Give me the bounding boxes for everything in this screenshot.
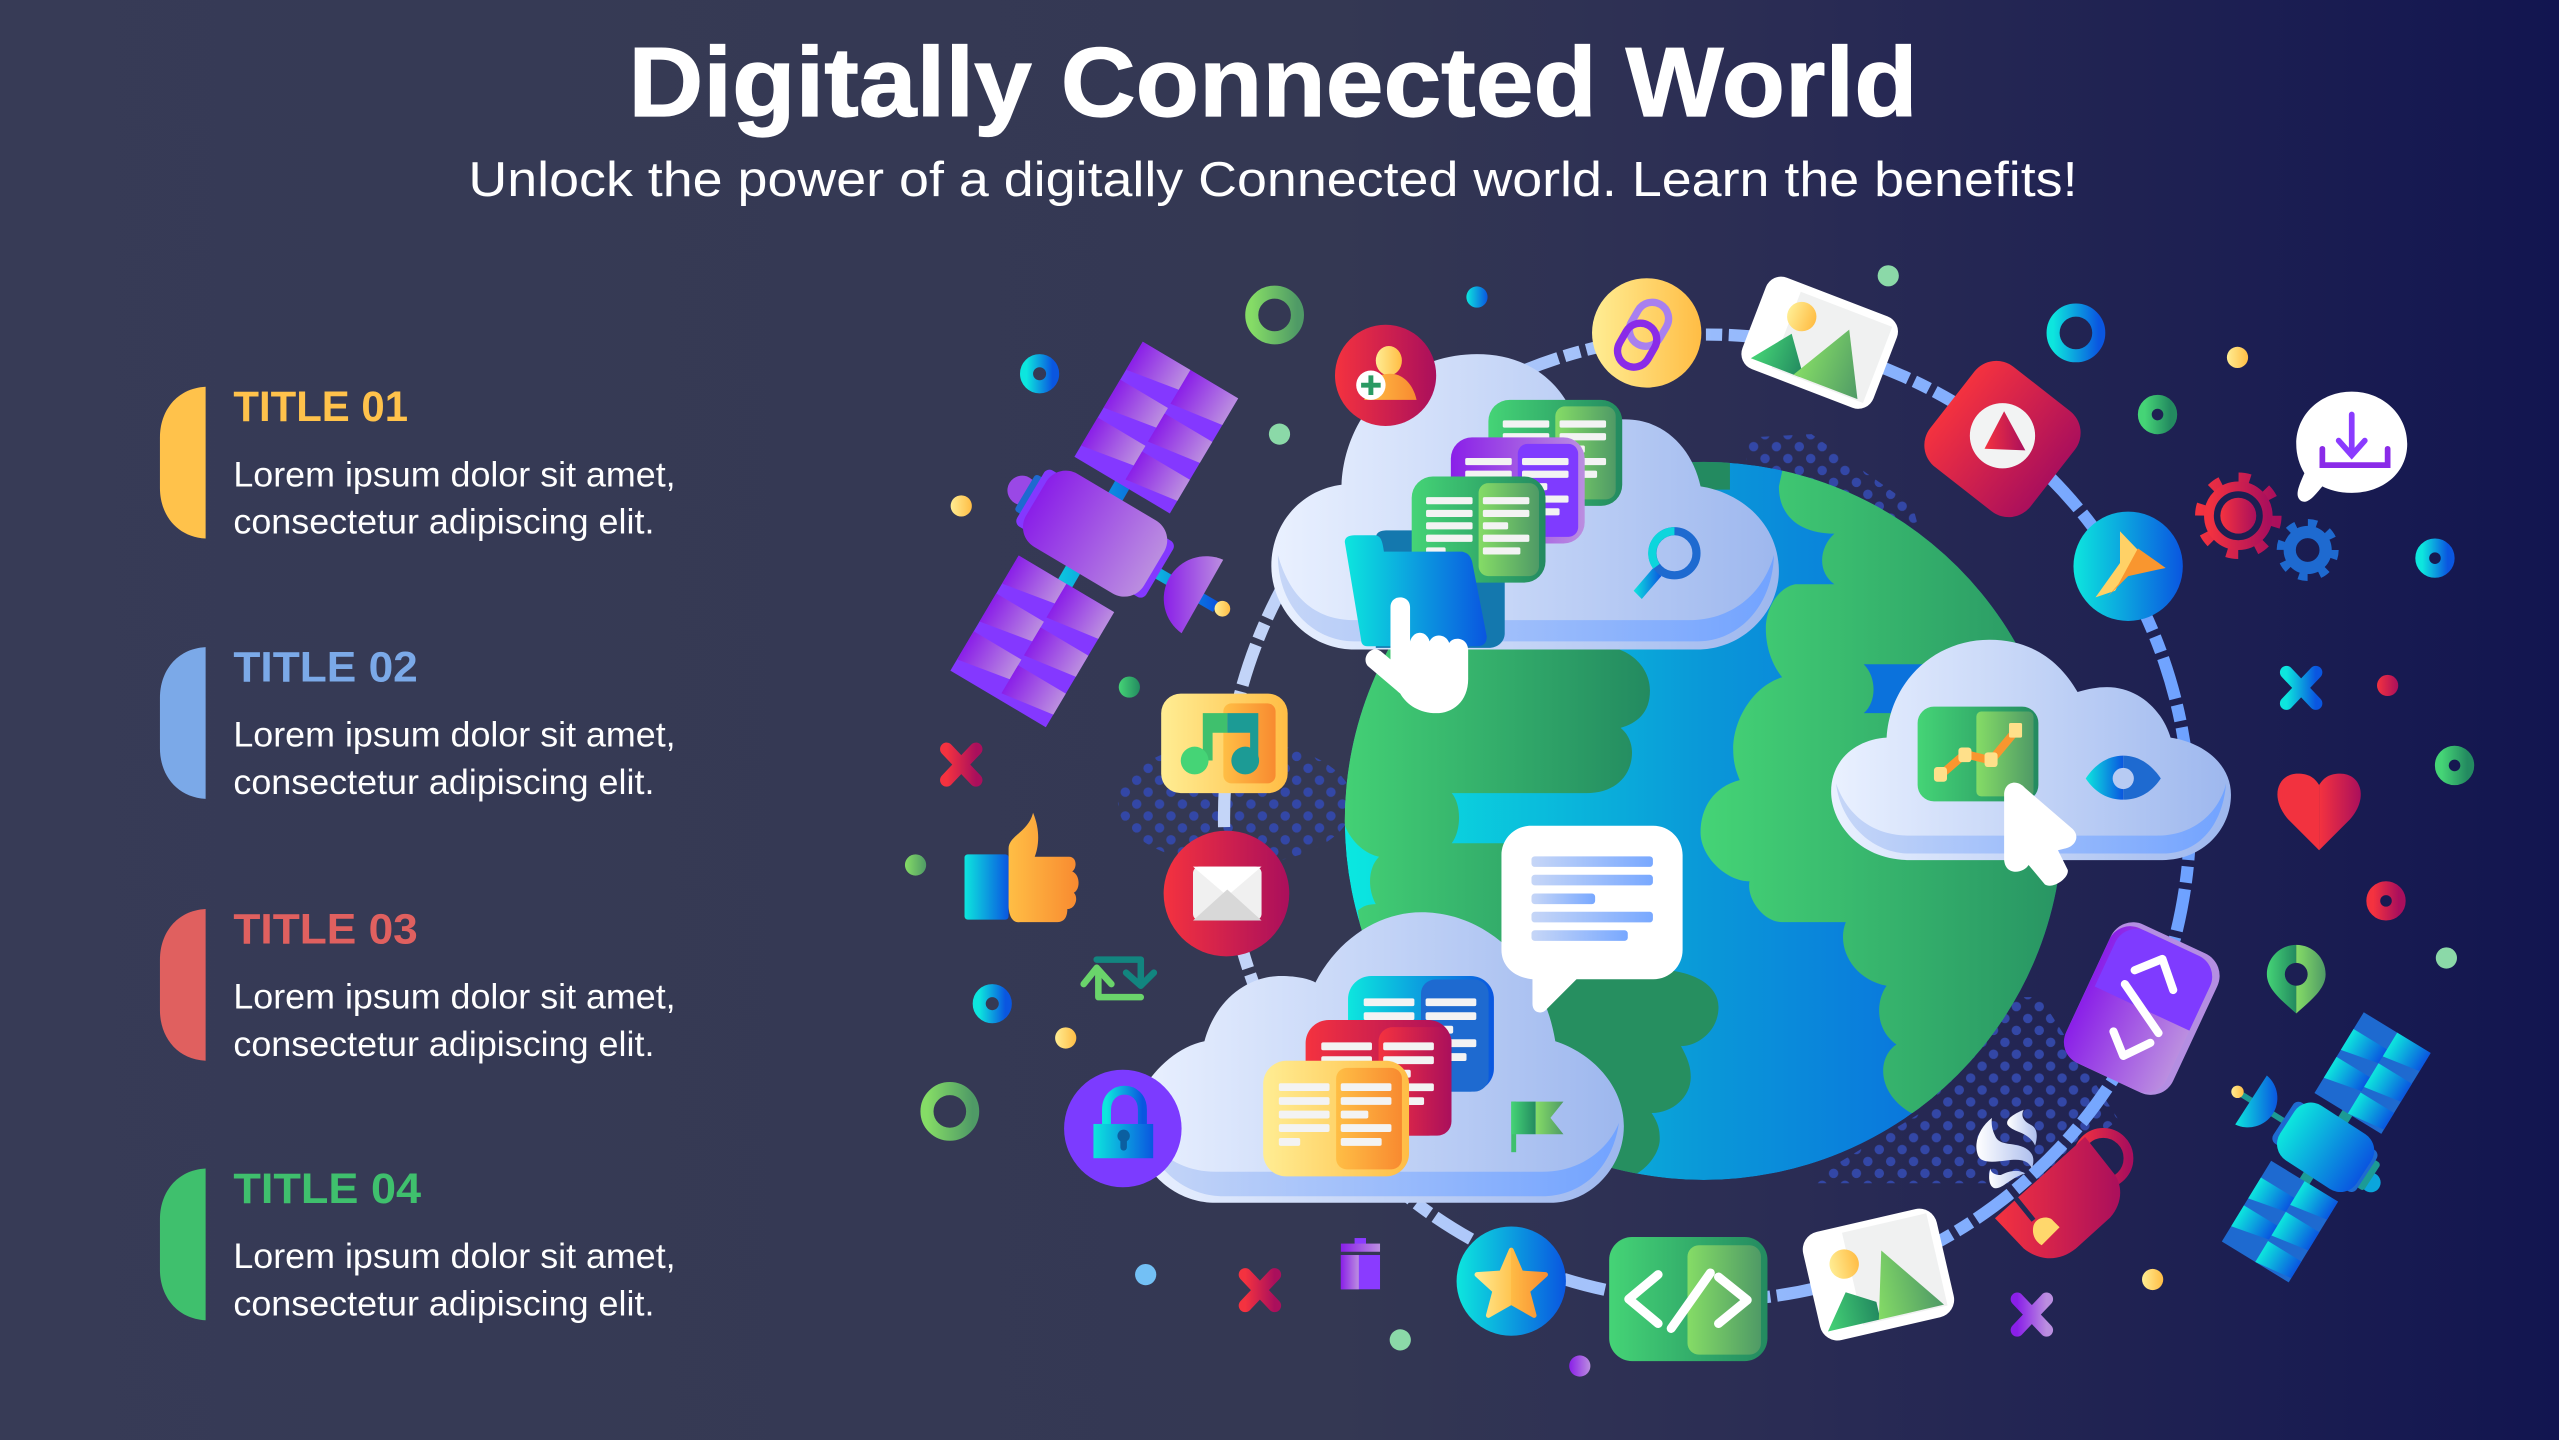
- cloud shadow band top: [1278, 555, 1774, 641]
- dot light blue bottom: [1135, 1264, 1156, 1285]
- list item 02: [160, 643, 676, 802]
- blue solar panel upper: [2314, 1012, 2431, 1134]
- dot mint top: [1878, 265, 1899, 286]
- accent tab 02: [160, 647, 206, 799]
- cursor: [2004, 783, 2076, 886]
- title: Digitally Connected World: [628, 27, 1918, 137]
- icon: trash: [1341, 1238, 1380, 1289]
- blue satellite struts: [2280, 1072, 2373, 1221]
- speech bubble with text lines: [1501, 826, 1683, 1012]
- cross cyan: [2286, 672, 2316, 703]
- west continent: [1344, 650, 1650, 942]
- blue solar panel lower: [2222, 1161, 2338, 1282]
- icon: coffee mug: [1976, 1110, 2128, 1258]
- ocean: [1345, 462, 2063, 1180]
- ring green small right: [2442, 753, 2467, 778]
- heading 03: TITLE 03: [233, 905, 418, 952]
- cloud body top: [1271, 354, 1779, 650]
- halftone dot patches: [1118, 434, 2118, 1183]
- satellite dish: [1164, 556, 1223, 633]
- cloud body bottom: [1133, 912, 1624, 1203]
- solar panel upper: [1074, 342, 1238, 513]
- heading 02: TITLE 02: [233, 643, 418, 690]
- icon: red gear: [2201, 478, 2276, 553]
- accent tab 03: [160, 909, 206, 1061]
- document green back: [1488, 400, 1622, 506]
- blue dish: [2235, 1075, 2277, 1127]
- icon: red play badge: [1913, 350, 2092, 528]
- dot yellow upper right: [2227, 347, 2248, 368]
- magnifier: [1634, 531, 1696, 599]
- icon: purple code card: [2056, 914, 2228, 1103]
- folder back: [1376, 530, 1505, 648]
- dot red right: [2377, 675, 2398, 696]
- icon: mail badge: [1164, 831, 1289, 956]
- icon: map pin: [2267, 945, 2326, 1013]
- top land lobe: [1692, 462, 1730, 490]
- hand pointer: [1366, 597, 1468, 713]
- icon: download bubble: [2296, 392, 2407, 502]
- ring blue small upper left: [1027, 361, 1053, 387]
- description 03: consectetur adipiscing elit.: [233, 1025, 654, 1064]
- icon: image card top: [1737, 272, 1903, 414]
- chart card: [1918, 707, 2038, 801]
- ring blue small right: [2422, 545, 2448, 571]
- description 02: Lorem ipsum dolor sit amet,: [233, 716, 676, 755]
- cloud shadow band bottom: [1142, 1123, 1619, 1196]
- flag: [1511, 1102, 1563, 1152]
- document purple: [1451, 437, 1585, 543]
- subtitle: Unlock the power of a digitally Connected world. Learn the benefits!: [468, 153, 2078, 207]
- cloud body right: [1831, 640, 2231, 860]
- cross red bottom: [1245, 1275, 1275, 1306]
- dot yellow upper left: [951, 495, 972, 517]
- cloud: bottom: [1133, 912, 1624, 1203]
- icon: thumbs up: [965, 813, 1079, 922]
- icon: heart: [2277, 774, 2361, 850]
- cross red left: [947, 749, 976, 780]
- dot yellow left: [1055, 1027, 1076, 1049]
- icon: code square: [1609, 1237, 1767, 1361]
- cloud shadow band right: [1836, 783, 2226, 854]
- icon: blue gear: [2281, 523, 2335, 577]
- icon: navigation badge: [2073, 512, 2183, 621]
- ring blue small left: [979, 991, 1005, 1017]
- orbit dashed ring: [1224, 335, 2190, 1301]
- document red: [1306, 1020, 1451, 1136]
- satellite: blue: [2222, 1012, 2431, 1282]
- accent tab 01: [160, 387, 206, 539]
- icon: star badge: [1457, 1226, 1566, 1336]
- list item 01: [160, 383, 676, 542]
- icon: music note square: [1161, 694, 1288, 793]
- description 01: Lorem ipsum dolor sit amet,: [233, 455, 676, 494]
- description 01: consectetur adipiscing elit.: [233, 503, 654, 542]
- heading 04: TITLE 04: [233, 1165, 421, 1212]
- description 02: consectetur adipiscing elit.: [233, 763, 654, 802]
- satellite struts: [1031, 428, 1155, 641]
- satellite: purple: [950, 342, 1238, 727]
- dot blue top: [1466, 286, 1488, 308]
- ring green large left: [927, 1089, 973, 1134]
- east continent: [1700, 470, 2058, 1113]
- icon: image card bottom: [1799, 1205, 1958, 1344]
- cloud: right: [1831, 640, 2231, 886]
- description 04: Lorem ipsum dolor sit amet,: [233, 1237, 676, 1276]
- list item 03: [160, 905, 676, 1064]
- ring blue large: [2053, 310, 2099, 356]
- globe: [1344, 462, 2058, 1180]
- dish tip: [1215, 601, 1230, 617]
- icon: swap arrows: [1084, 960, 1154, 997]
- dot mint upper: [1269, 424, 1290, 445]
- dot mint right: [2436, 947, 2457, 969]
- cross purple: [2017, 1299, 2047, 1330]
- dot yellow bottom right: [2142, 1269, 2163, 1290]
- dot mint bottom: [1390, 1329, 1411, 1350]
- cloud: top: [1271, 354, 1779, 713]
- accent tab 04: [160, 1169, 206, 1320]
- icon: link badge: [1592, 278, 1701, 388]
- description 04: consectetur adipiscing elit.: [233, 1284, 654, 1323]
- blue satellite body: [2265, 1092, 2400, 1211]
- ocean inlet: [1864, 664, 1922, 714]
- ring green small: [2145, 402, 2170, 427]
- document green front: [1412, 477, 1546, 583]
- folder front: [1345, 535, 1487, 646]
- dot green left: [905, 854, 926, 876]
- list item 04: [160, 1165, 676, 1323]
- solar panel lower: [950, 556, 1114, 727]
- dot green mid: [1119, 676, 1140, 698]
- description 03: Lorem ipsum dolor sit amet,: [233, 978, 676, 1017]
- icon: person add badge: [1335, 325, 1436, 426]
- heading 01: TITLE 01: [233, 383, 408, 430]
- ring green large top: [1252, 292, 1297, 338]
- dot purple bottom: [1569, 1355, 1590, 1377]
- decorative dots and rings: [905, 265, 2467, 1377]
- satellite body: [988, 446, 1181, 608]
- document yellow: [1263, 1061, 1409, 1176]
- icon: lock badge: [1064, 1070, 1182, 1187]
- document blue: [1348, 976, 1494, 1092]
- southern land: [1534, 969, 1719, 1173]
- eye: [2086, 756, 2161, 800]
- ring red small: [2373, 888, 2399, 914]
- blue dish tip: [2231, 1086, 2244, 1098]
